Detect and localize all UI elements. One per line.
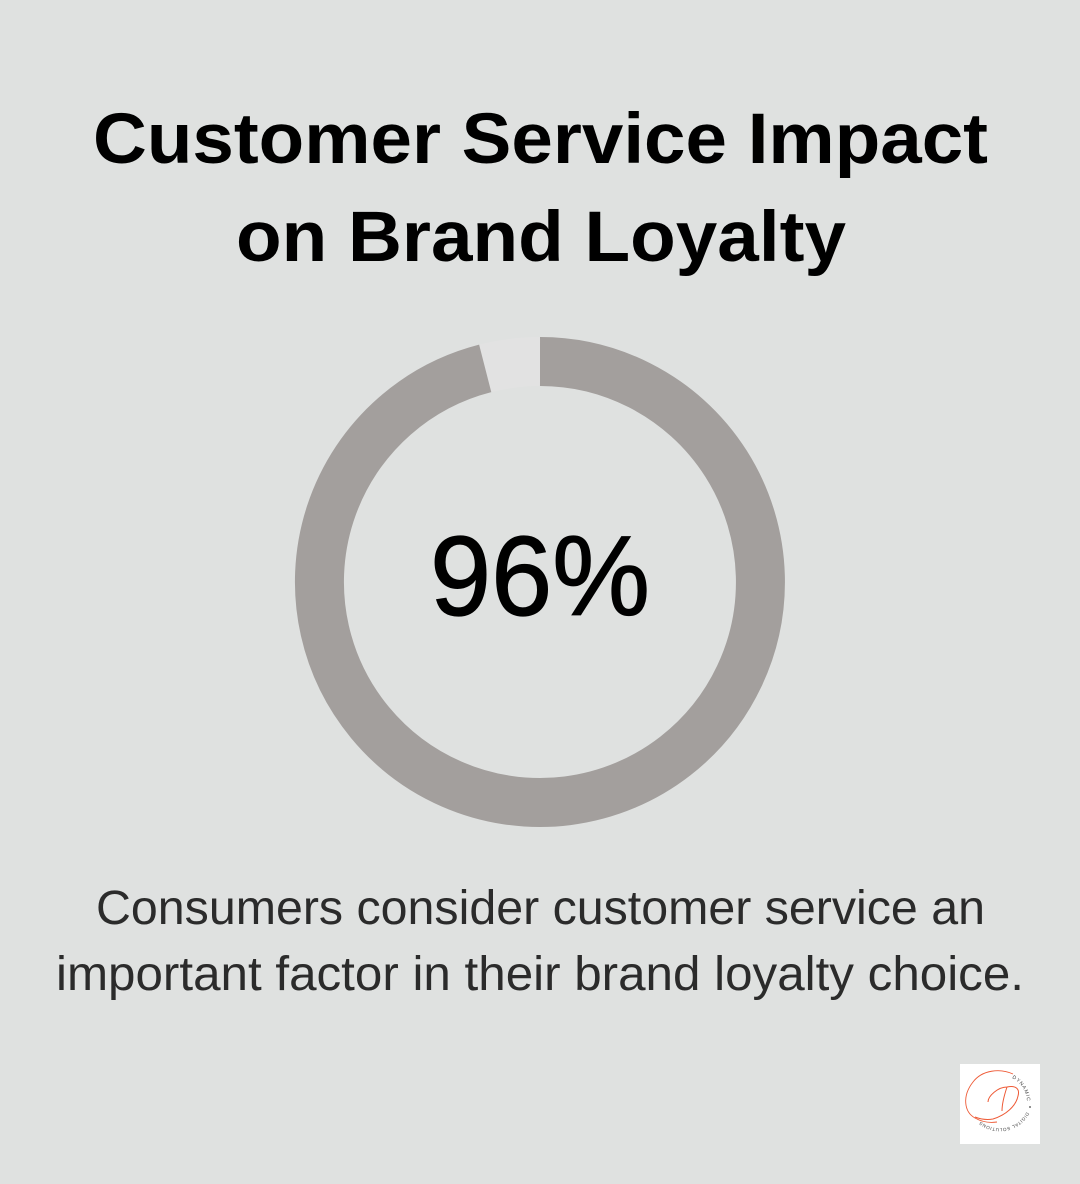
remaining 4% segment xyxy=(485,362,540,368)
donut chart: 96% xyxy=(319,362,760,802)
percentage value: 96% xyxy=(430,513,650,639)
logo: DYNAMIC xyxy=(1012,1075,1030,1101)
description text: Consumers consider customer service an xyxy=(96,882,985,935)
title xyxy=(93,100,988,277)
logo xyxy=(960,1064,1040,1144)
title: on Brand Loyalty xyxy=(236,198,847,277)
title: Customer Service Impact xyxy=(93,100,988,179)
logo: DIGITAL SOLUTIONS xyxy=(979,1112,1030,1132)
description text xyxy=(56,882,1024,1001)
96% segment xyxy=(319,362,760,802)
description text: important factor in their brand loyalty choice. xyxy=(56,948,1024,1001)
